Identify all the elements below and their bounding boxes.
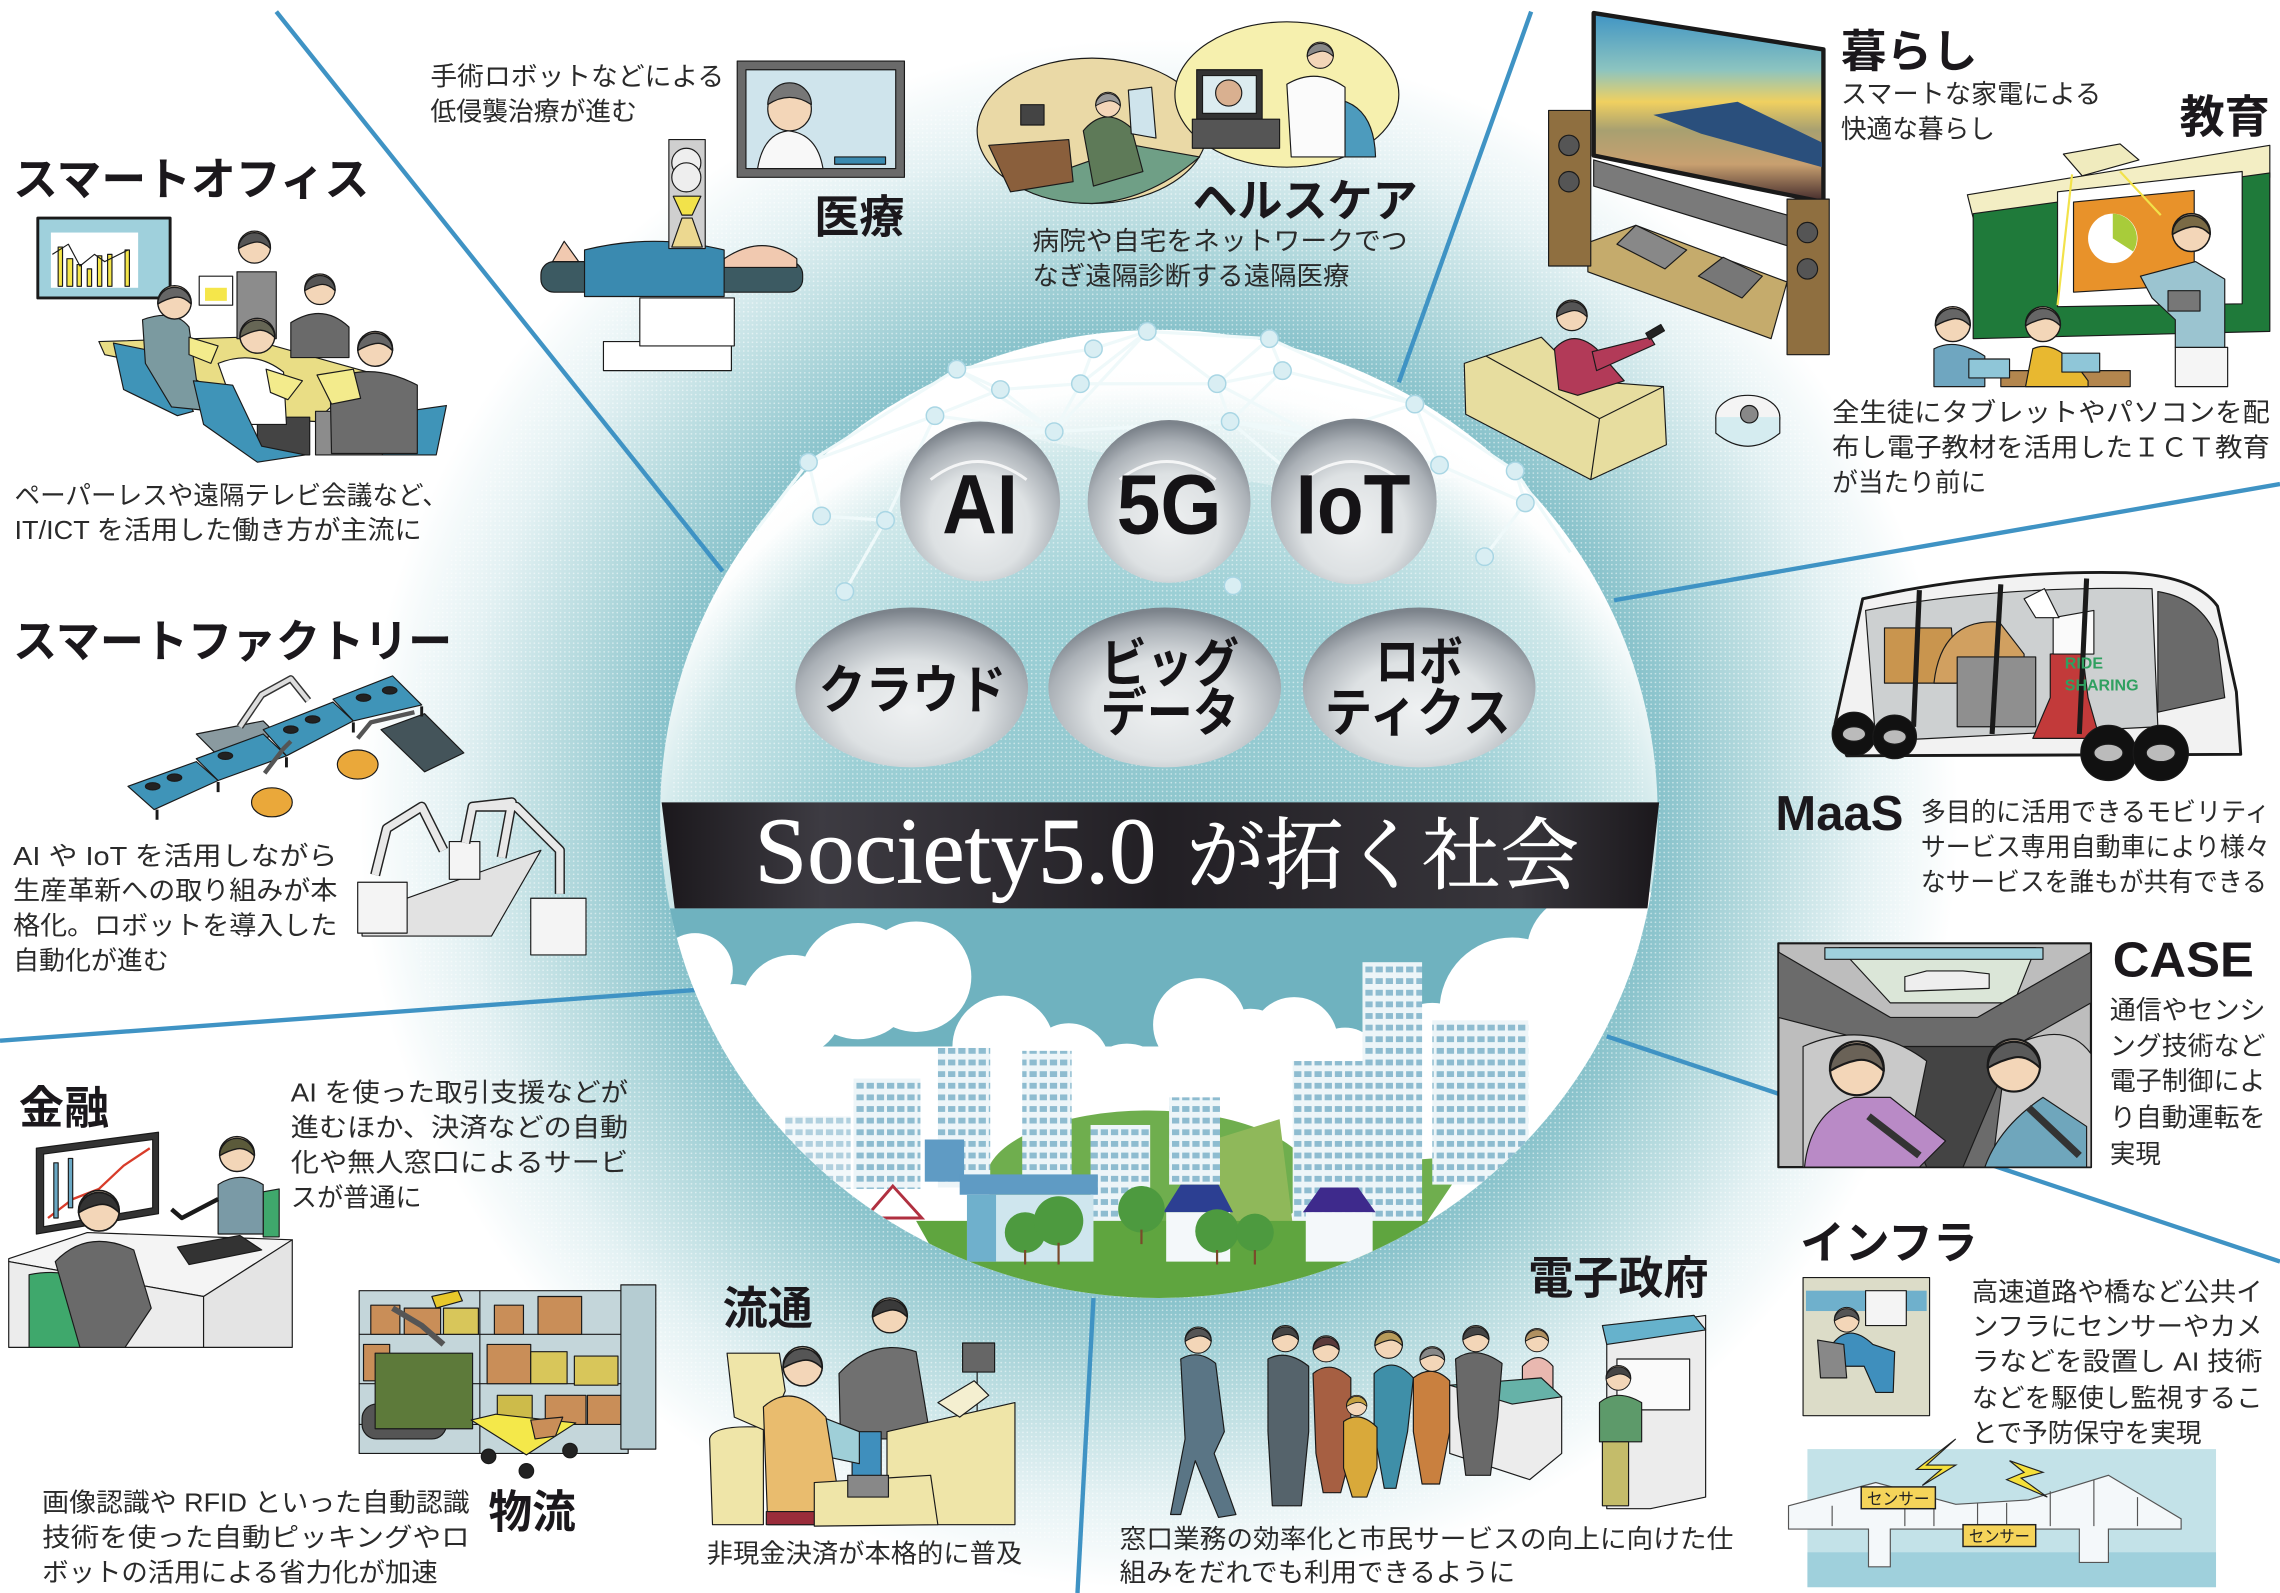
body text: healthcare — [1032, 226, 1408, 291]
heading: education: 教育 — [2180, 91, 2270, 142]
body text: e-government: 組みをだれでも利用できるように — [1120, 1557, 1515, 1587]
body text: MaaS: 多目的に活用できるモビリティ — [1921, 797, 2270, 827]
body text: MaaS: サービス専用自動車により様々 — [1921, 832, 2270, 862]
bubble: 5G: 5G — [1117, 457, 1221, 551]
body text: finance: AI を使った取引支援などが — [291, 1078, 628, 1108]
body text: CASE: 電子制御によ — [2110, 1066, 2265, 1096]
heading: infrastructure: インフラ — [1800, 1218, 1978, 1269]
panel: CASE — [1778, 933, 2265, 1169]
body text: CASE: 通信やセンシ — [2110, 995, 2265, 1025]
body text: MaaS: なサービスを誰もが共有できる — [1921, 867, 2267, 897]
heading: finance: 金融 — [19, 1083, 109, 1134]
body text: smart office: ペーパーレスや遠隔テレビ会議など、 — [15, 480, 448, 510]
title band: Society5.0 — [755, 799, 1156, 903]
bubble: 5G — [1088, 420, 1251, 583]
illustration: autonomous bus — [1832, 572, 2241, 781]
body text: CASE: ング技術など — [2110, 1031, 2265, 1061]
panel: education — [1832, 91, 2270, 497]
title band: が拓く社会 — [1187, 812, 1579, 899]
heading: logistics: 物流 — [489, 1487, 576, 1538]
body text: smart factory — [13, 841, 337, 975]
body text: home life: スマートな家電による — [1841, 79, 2101, 109]
body text: home life — [1841, 79, 2101, 144]
body text: infrastructure: などを駆使し監視するこ — [1972, 1383, 2263, 1413]
central sphere — [625, 323, 1672, 1308]
bubble: big data: ビッグ — [1101, 636, 1239, 694]
panel: retail distribution — [707, 1283, 1022, 1568]
bubble: IoT — [1271, 419, 1437, 584]
panel: medical — [430, 61, 904, 371]
sphere: sky and clouds — [625, 887, 1672, 1308]
bubble: AI: AI — [942, 457, 1018, 551]
body text: education — [1832, 398, 2270, 497]
body text: medical — [430, 62, 724, 127]
bubble: big data: データ — [1101, 685, 1239, 743]
body text: infrastructure: とで予防保守を実現 — [1972, 1418, 2201, 1448]
body text: smart factory: 生産革新への取り組みが本 — [13, 876, 337, 906]
body text: finance: 化や無人窓口によるサービ — [291, 1147, 628, 1177]
body text: smart factory: 格化。ロボットを導入した — [13, 911, 337, 941]
body text: logistics: 画像認識や RFID といった自動認識 — [42, 1488, 470, 1518]
illustration: investment consultation — [9, 1132, 292, 1347]
heading: e-government: 電子政府 — [1528, 1253, 1709, 1304]
sensor label 2: センサー — [1969, 1527, 2030, 1546]
body text: e-government — [1120, 1524, 1733, 1587]
heading: CASE: CASE — [2113, 933, 2254, 988]
sensor label 1: センサー — [1867, 1489, 1930, 1508]
bubble: cloud: クラウド — [819, 662, 1006, 720]
heading: medical: 医療 — [814, 192, 904, 243]
bubble: robotics — [1303, 608, 1536, 767]
panel: e-government — [1120, 1253, 1733, 1587]
panel: finance — [9, 1078, 628, 1347]
bubble: cloud — [795, 608, 1028, 767]
panel: smart factory — [13, 616, 586, 975]
icon: lightning bolts — [1916, 1439, 2047, 1497]
halo glow around sphere — [359, 39, 1959, 1589]
panel: infrastructure — [1789, 1218, 2263, 1587]
body text: smart factory: AI や IoT を活用しながら — [13, 841, 337, 871]
body text: retail distribution: 非現金決済が本格的に普及 — [707, 1538, 1022, 1568]
body text: infrastructure: ンフラにセンサーやカメ — [1972, 1312, 2263, 1342]
panel: healthcare — [977, 22, 1418, 291]
illustration: remote diagnosis — [977, 22, 1399, 203]
illustration: checkout counter — [710, 1298, 1015, 1526]
body text: smart office — [15, 480, 448, 545]
illustration: car interior — [1778, 943, 2091, 1167]
body text: education: が当たり前に — [1832, 467, 1986, 497]
illustration: TV, speakers and sofa — [1464, 13, 1829, 480]
bubble: AI — [900, 422, 1060, 581]
illustration: classroom — [1934, 144, 2270, 387]
sphere: network dome — [756, 323, 1570, 600]
illustration: bridge with sensors — [1789, 1439, 2216, 1587]
heading: retail distribution: 流通 — [723, 1283, 813, 1334]
panel: home life — [1464, 13, 2101, 480]
illustration: autonomous bus: SHARING — [2065, 677, 2139, 694]
body text: logistics — [42, 1488, 470, 1587]
body text: infrastructure — [1972, 1277, 2263, 1448]
body text: finance: スが普通に — [291, 1182, 422, 1212]
body text: smart office: IT/ICT を活用した働き方が主流に — [15, 515, 422, 545]
panel: smart office — [13, 154, 448, 545]
heading: healthcare: ヘルスケア — [1192, 176, 1418, 227]
bubble: IoT: IoT — [1296, 457, 1410, 551]
body text: medical: 低侵襲治療が進む — [430, 97, 637, 127]
body text: logistics: 技術を使った自動ピッキングやロ — [42, 1522, 470, 1552]
body text: smart factory: 自動化が進む — [13, 945, 169, 975]
illustration: surgical robot — [541, 140, 803, 371]
body text: healthcare: 病院や自宅をネットワークでつ — [1032, 226, 1408, 256]
body text: e-government: 窓口業務の効率化と市民サービスの向上に向けた仕 — [1120, 1524, 1733, 1554]
title band — [662, 799, 1659, 908]
illustration: autonomous bus: RIDE — [2065, 656, 2103, 673]
body text: medical: 手術ロボットなどによる — [430, 62, 724, 92]
bubble: big data — [1048, 608, 1281, 767]
illustration: service queue and kiosk — [1171, 1315, 1706, 1517]
body text: logistics: ボットの活用による省力化が加速 — [42, 1557, 438, 1587]
body text: CASE: り自動運転を — [2110, 1102, 2265, 1132]
body text: education: 全生徒にタブレットやパソコンを配 — [1832, 398, 2270, 428]
panel: logistics — [42, 1285, 656, 1587]
body text: MaaS — [1921, 797, 2270, 897]
bubble: robotics: ティクス — [1325, 685, 1511, 743]
technology bubbles — [795, 419, 1536, 767]
illustration: meeting room — [38, 218, 446, 462]
illustration: production line robots — [128, 676, 586, 955]
body text: CASE: 実現 — [2110, 1139, 2161, 1169]
heading: smart office: スマートオフィス — [13, 154, 369, 205]
bubble: robotics: ロボ — [1376, 634, 1463, 692]
body text: education: 布し電子教材を活用したＩＣＴ教育 — [1832, 432, 2270, 462]
body text: finance — [291, 1078, 628, 1212]
body text: infrastructure: 高速道路や橋など公共イ — [1972, 1277, 2263, 1307]
body text: infrastructure: ラなどを設置し AI 技術 — [1972, 1347, 2263, 1377]
illustration: doctor on monitor — [737, 61, 904, 177]
heading: MaaS: MaaS — [1775, 786, 1903, 841]
illustration: monitoring operator — [1803, 1278, 1930, 1416]
body text: home life: 快適な暮らし — [1841, 114, 1995, 144]
illustration: warehouse robot — [359, 1285, 656, 1478]
body text: CASE — [2110, 995, 2265, 1169]
body text: finance: 進むほか、決済などの自動 — [291, 1113, 628, 1143]
body text: healthcare: なぎ遠隔診断する遠隔医療 — [1032, 261, 1349, 291]
heading: smart factory: スマートファクトリー — [13, 616, 452, 667]
heading: home life: 暮らし — [1841, 26, 1978, 77]
panel: MaaS — [1775, 572, 2270, 897]
sphere: city illustration — [785, 962, 1528, 1298]
